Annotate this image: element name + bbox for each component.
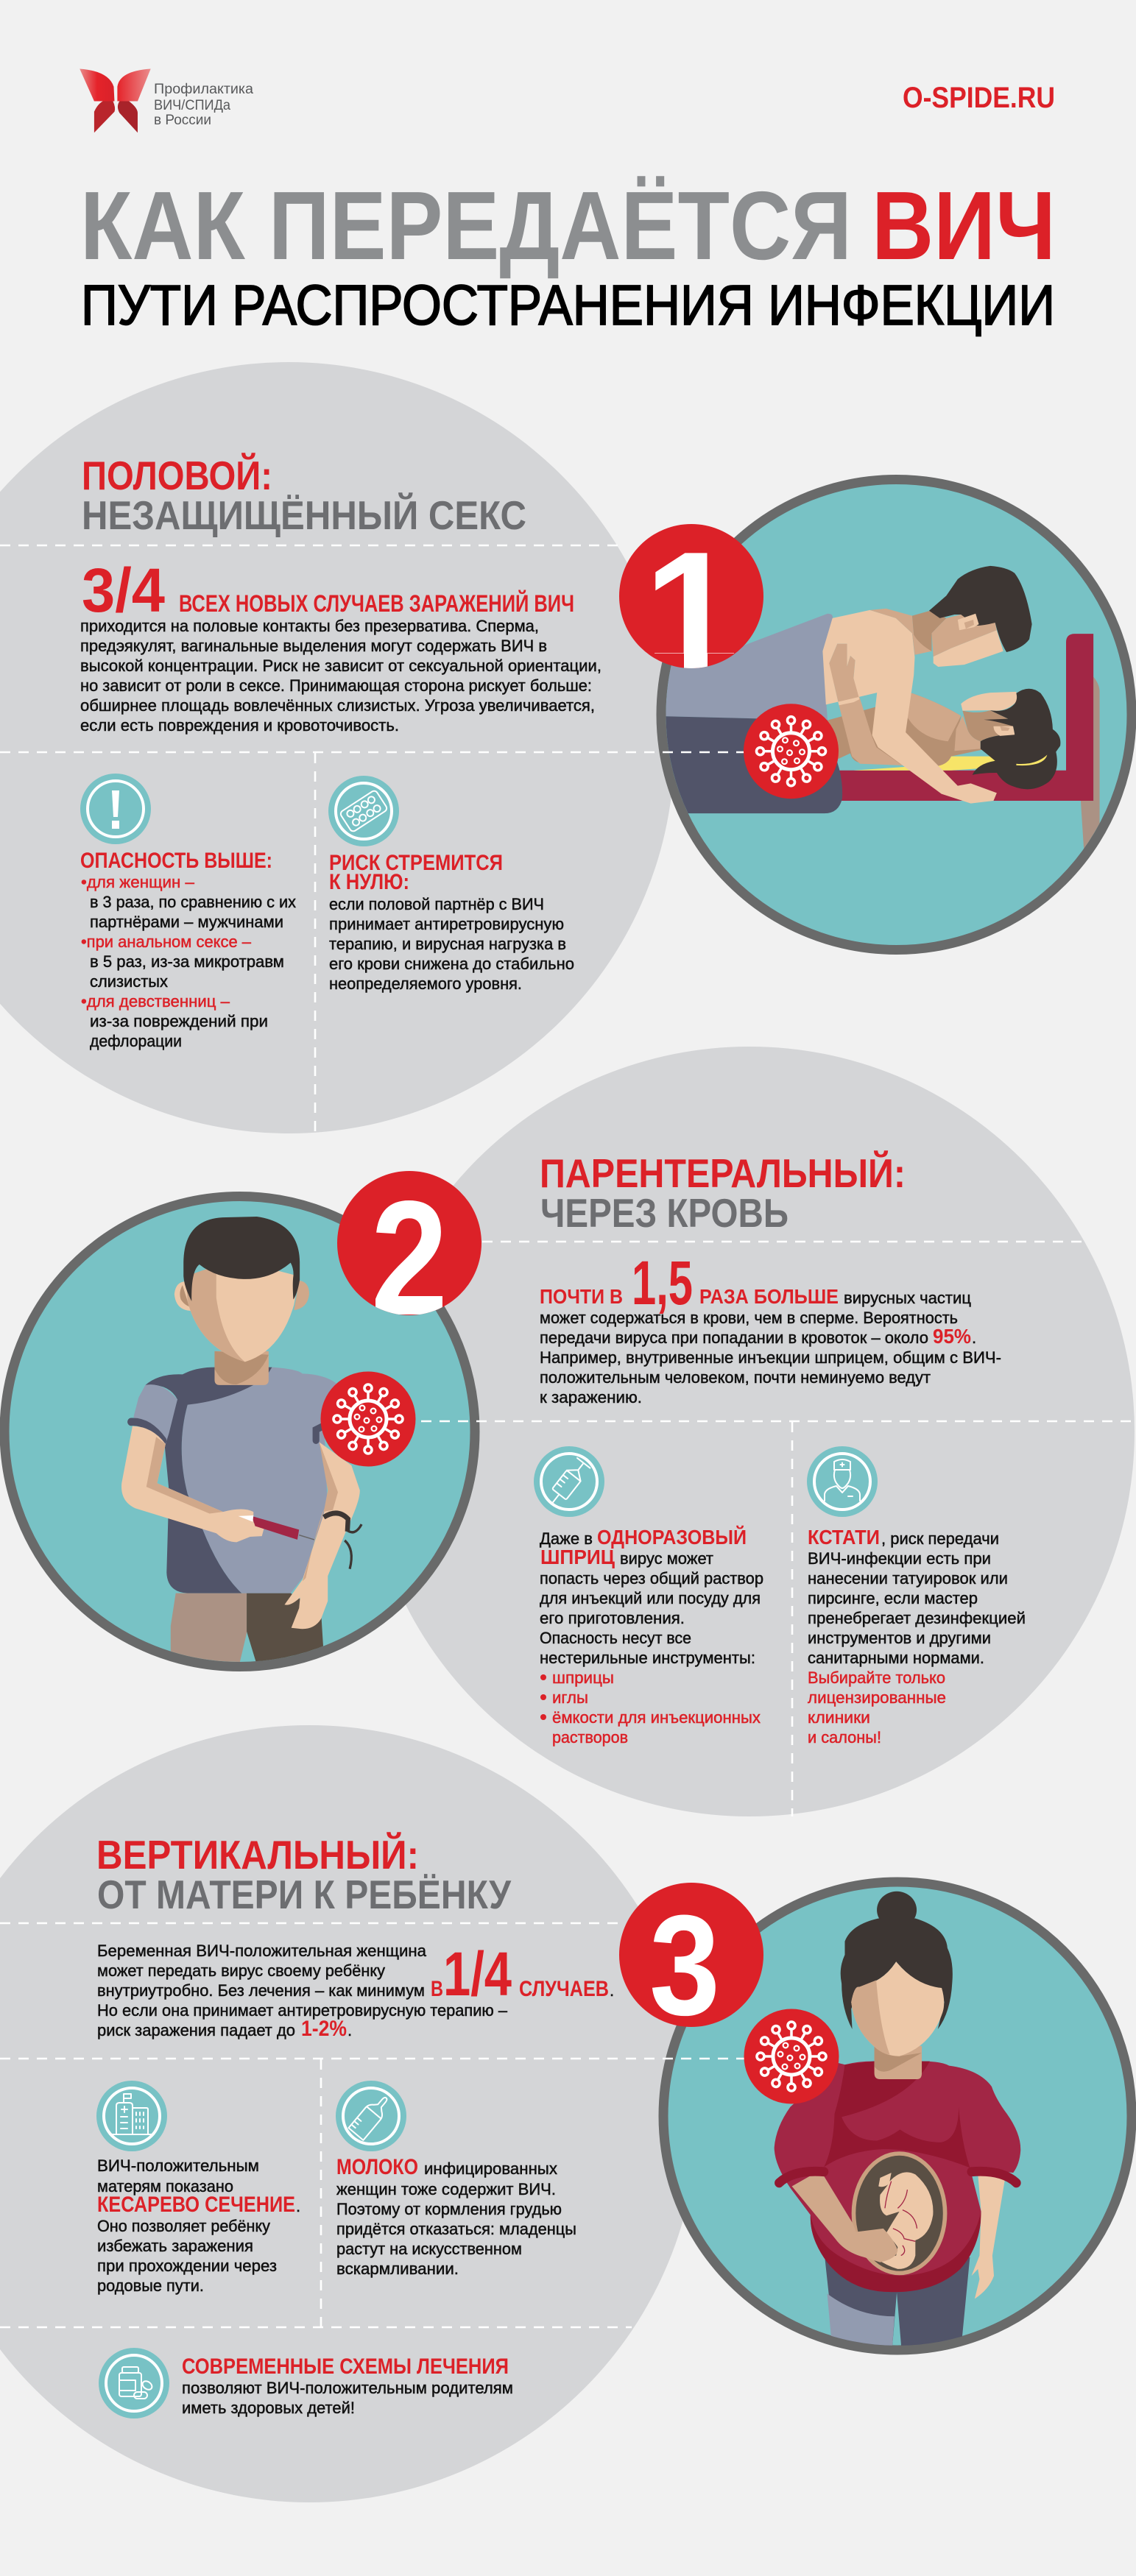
text block: milk: МОЛОКО [336,2155,418,2179]
text block: danger higher: партнёрами – мужчинами [90,913,283,931]
text block: section 2 intro [540,1248,1001,1406]
text block: tattoos and piercing: , риск передачи [881,1529,999,1548]
icon: virus 3 [744,2009,839,2103]
text block: section 1 intro: обширнее площадь вовлечённых слизистых. Угроза увеличивается, [80,696,595,715]
text block: milk: придётся отказаться: младенцы [336,2220,576,2238]
text block: section 2 intro: 1,5 [632,1248,693,1317]
text block: section 3 intro: . [610,1981,614,2000]
text block: caesarean: Оно позволяет ребёнку [97,2217,270,2235]
text block: caesarean: . [296,2197,300,2215]
text block: disposable syringe: иглы [552,1688,588,1707]
icon: pills [99,2348,169,2418]
icon: pill blister [328,776,399,846]
text block: risk near zero: К НУЛЮ: [329,870,409,894]
text block: section 2 intro: передачи вируса при попадании в кровоток – около [540,1328,928,1347]
icon: virus 1 [744,704,839,799]
text block: tattoos and piercing: и салоны! [808,1728,881,1747]
text block: risk near zero: его крови снижена до стабильно [329,955,574,973]
text block: section 3 intro: СЛУЧАЕВ [519,1977,609,2001]
logo [80,69,253,132]
text block: milk: инфицированных [424,2159,557,2178]
text block: caesarean: избежать заражения [97,2237,253,2255]
icon: exclamation [80,774,151,844]
text block: section 3 intro: . [347,2021,352,2039]
text block: disposable syringe: попасть через общий раствор [540,1569,763,1588]
text block: disposable syringe: ОДНОРАЗОВЫЙ [597,1525,747,1549]
text block: milk: вскармливании. [336,2260,459,2278]
text block: modern treatment: иметь здоровых детей! [182,2399,355,2417]
text block: section 1 intro: предэякулят, вагинальные выделения могут содержать ВИЧ в [80,637,547,655]
text block: tattoos and piercing: пирсинге, если мастер [808,1589,978,1607]
panel: section 1 background circle [0,362,674,1133]
text block: section 3 intro: Беременная ВИЧ-положительная женщина [97,1942,427,1960]
text block: disposable syringe: для инъекций или посуду для [540,1589,761,1607]
heading: section 3 [96,1831,512,1917]
heading: section 2: ЧЕРЕЗ КРОВЬ [540,1190,789,1236]
text block: danger higher: слизистых [90,972,168,991]
logo text: в России [154,113,211,128]
text block: section 1 intro: но зависит от роли в сексе. Принимающая сторона рискует больше: [80,676,592,695]
text block: modern treatment: позволяют ВИЧ-положительным родителям [182,2379,513,2397]
text block: milk: Поэтому от кормления грудью [336,2200,562,2218]
panel: section 3 background circle [0,1725,698,2502]
number badge 1: 1 [643,517,739,707]
text block: section 3 intro: В [431,1977,443,2001]
text block: disposable syringe: ШПРИЦ [540,1546,615,1568]
text block: caesarean: матерям показано [97,2177,233,2195]
text block: danger higher: дефлорации [90,1032,182,1050]
text block: tattoos and piercing: инструментов и другими [808,1629,991,1647]
text block: caesarean: КЕСАРЕВО СЕЧЕНИЕ [97,2193,295,2217]
number badge 1 [619,524,763,668]
text block: tattoos and piercing: ВИЧ-инфекции есть при [808,1549,991,1568]
text block: tattoos and piercing: санитарными нормами. [808,1649,984,1667]
text block: milk [336,2155,576,2278]
illustration: man with syringe [4,1197,475,1676]
text block: caesarean: родовые пути. [97,2276,204,2295]
text block: milk: растут на искусственном [336,2240,522,2258]
title: КАК ПЕРЕДАЁТСЯ [80,171,852,280]
heading: section 1: ПОЛОВОЙ: [82,452,272,498]
text block: danger higher [80,849,296,1050]
text block: tattoos and piercing: нанесении татуировок или [808,1569,1008,1588]
number badge 3: 3 [649,1886,720,2045]
text block: risk near zero: РИСК СТРЕМИТСЯ [329,851,503,875]
text block: danger higher: ОПАСНОСТЬ ВЫШЕ: [80,849,272,873]
text block: risk near zero: если половой партнёр с ВИЧ [329,895,544,913]
text block: section 1 intro: если есть повреждения и кровоточивость. [80,716,399,735]
text block: disposable syringe: Опасность несут все [540,1629,691,1647]
text block: danger higher: •для девственниц – [81,992,230,1011]
text block: section 1 intro: высокой концентрации. Риск не зависит от сексуальной ориентации, [80,657,601,675]
illustration: couple in bed [646,480,1132,949]
panel: section 2 dashed dividers [421,1242,1136,1816]
text block: section 1 intro: приходится на половые контакты без презерватива. Сперма, [80,617,539,635]
text block: tattoos and piercing: КСТАТИ [808,1526,880,1549]
icon: hospital [96,2081,167,2151]
illustration: pregnant woman [663,1882,1132,2350]
text block: section 2 intro: может содержаться в крови, чем в сперме. Вероятность [540,1309,958,1327]
icon: nurse [807,1446,878,1517]
panel: section 3 dashed dividers [0,1923,744,2327]
text block: section 3 intro: 1/4 [443,1939,512,2009]
text block: section 3 intro: Но если она принимает антиретровирусную терапию – [97,2001,508,2020]
text block: tattoos and piercing [808,1526,1026,1747]
text block: disposable syringe: растворов [552,1728,628,1747]
text block: risk near zero [329,851,574,993]
panel: section 1 dashed dividers [0,545,744,1133]
text block: disposable syringe: нестерильные инструменты: [540,1649,755,1667]
text block: danger higher: из-за повреждений при [90,1012,268,1030]
text block: tattoos and piercing: клиники [808,1708,870,1727]
text block: tattoos and piercing: лицензированные [808,1688,946,1707]
text block: danger higher: •для женщин – [81,873,195,891]
logo text: ВИЧ/СПИДа [154,98,230,113]
heading: section 1 [82,452,526,538]
text block: disposable syringe [540,1525,763,1747]
subtitle: ПУТИ РАСПРОСТРАНЕНИЯ ИНФЕКЦИИ [81,274,1055,337]
text block: disposable syringe: ёмкости для инъекционных [552,1708,761,1727]
logo text: Профилактика [154,82,253,97]
text block: section 2 intro: ПОЧТИ В [540,1285,623,1308]
text block: section 3 intro: 1-2% [301,2017,347,2041]
text block: disposable syringe: его приготовления. [540,1609,685,1627]
site url: O-SPIDE.RU [903,82,1055,114]
icon: butterfly logo [80,69,151,132]
heading: section 1: НЕЗАЩИЩЁННЫЙ СЕКС [82,492,526,538]
icon: virus 2 [321,1372,415,1466]
text block: caesarean [97,2156,300,2295]
text block: section 2 intro: . [972,1328,976,1347]
icon: syringe [534,1446,604,1517]
text block: risk near zero: терапию, и вирусная нагрузка в [329,935,566,953]
text block: section 3 intro: может передать вирус своему ребёнку [97,1961,385,1980]
text block: danger higher: •при анальном сексе – [81,933,252,951]
text block: tattoos and piercing: пренебрегает дезинфекцией [808,1609,1026,1627]
heading: section 2: ПАРЕНТЕРАЛЬНЫЙ: [540,1150,906,1196]
text block: tattoos and piercing: Выбирайте только [808,1669,945,1687]
logo text [154,82,253,128]
text block: modern treatment [182,2354,513,2417]
text block: section 2 intro: к заражению. [540,1388,642,1406]
number badge 3 [619,1883,763,2027]
text block: section 2 intro: Например, внутривенные инъекции шприцем, общим с ВИЧ- [540,1348,1001,1367]
text block: section 2 intro: вирусных частиц [844,1289,971,1307]
text block: danger higher: в 5 раз, из-за микротравм [90,952,284,971]
number badge 2 [337,1171,481,1315]
text block: section 1 intro: ВСЕХ НОВЫХ СЛУЧАЕВ ЗАРАЖЕНИЙ ВИЧ [179,590,574,617]
text block: section 2 intro: 95% [933,1325,971,1348]
text block: section 1 intro [80,556,601,735]
heading: section 3: ВЕРТИКАЛЬНЫЙ: [96,1831,419,1878]
text block: danger higher: в 3 раза, по сравнению с их [90,893,296,911]
heading: section 3: ОТ МАТЕРИ К РЕБЁНКУ [97,1872,512,1917]
text block: risk near zero: неопределяемого уровня. [329,974,522,993]
text block: milk: женщин тоже содержит ВИЧ. [336,2180,556,2198]
text block: caesarean: ВИЧ-положительным [97,2156,259,2175]
text block: caesarean: при прохождении через [97,2257,277,2275]
text block: risk near zero: принимает антиретровирусную [329,915,564,933]
text block: disposable syringe: Даже в [540,1529,593,1548]
text block: section 3 intro: внутриутробно. Без лечения – как минимум [97,1981,425,2000]
number badge 2: 2 [371,1167,448,1350]
text block: section 2 intro: РАЗА БОЛЬШЕ [699,1285,839,1308]
text block: section 3 intro [97,1939,614,2041]
text block: disposable syringe: вирус может [620,1549,713,1568]
text block: disposable syringe: шприцы [552,1669,614,1687]
icon: baby bottle [336,2081,406,2151]
heading: section 2 [540,1150,906,1236]
text block: section 3 intro: риск заражения падает до [97,2021,295,2039]
title: ВИЧ [872,171,1056,280]
text block: section 2 intro: положительным человеком, почти неминуемо ведут [540,1368,931,1387]
text block: modern treatment: СОВРЕМЕННЫЕ СХЕМЫ ЛЕЧЕНИЯ [182,2354,509,2379]
text block: section 1 intro: 3/4 [82,556,165,625]
panel: section 2 background circle [364,1047,1135,1816]
